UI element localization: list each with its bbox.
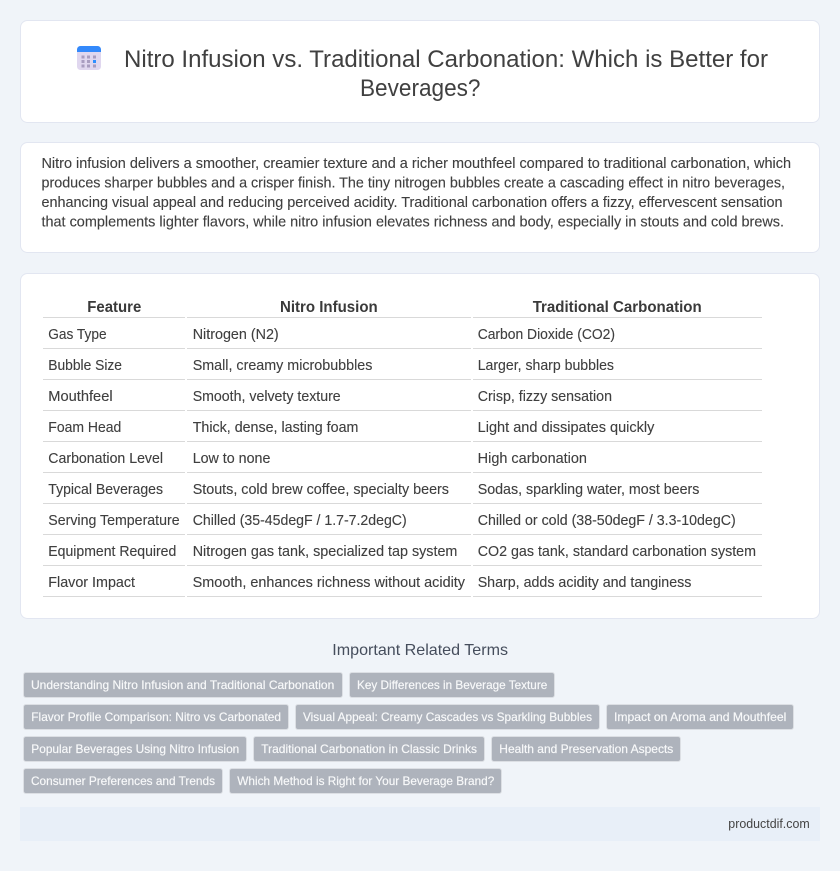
row: equipment required: CO2 gas tank, standard carbonation system [478,544,756,560]
tag: Traditional Carbonation in Classic Drinks [261,742,477,756]
row: bubble size [48,358,614,374]
tag: Understanding Nitro Infusion and Traditional Carbonation [31,678,334,692]
row: bubble size: Bubble Size [48,358,122,374]
footer bar [20,807,820,841]
panel: summary paragraph [20,142,820,252]
row: mouthfeel: Smooth, velvety texture [193,389,341,405]
row: typical beverages [48,482,699,498]
row: typical beverages: Sodas, sparkling water, most beers [478,482,699,498]
row: serving temperature: Chilled (35-45degF / 1.7-7.2degC) [193,513,407,529]
row: bubble size: Small, creamy microbubbles [193,358,372,374]
row: flavor impact: Sharp, adds acidity and tanginess [478,575,691,591]
heading: important related terms: Important Related Terms [332,642,508,659]
tag [350,672,554,698]
row: gas type: Nitrogen (N2) [193,327,279,343]
panel: comparison table [20,274,820,618]
text block: introduction: Nitro infusion delivers a smoother, creamier texture and a richer mouthfeel compared to traditional carbonation, which [42,156,791,172]
row: mouthfeel: Mouthfeel [48,389,113,405]
row: equipment required: Nitrogen gas tank, specialized tap system [193,544,457,560]
row: foam head: Thick, dense, lasting foam [193,420,358,436]
text block: introduction: that complements lighter flavors, while nitro infusion elevates richness and body, especially in stouts and cold brews. [42,214,784,230]
row: gas type: Carbon Dioxide (CO2) [478,327,615,343]
footer source text: productdif.com [728,817,810,831]
panel: title header [20,20,820,122]
row: carbonation level [48,451,587,467]
row: foam head: Foam Head [48,420,121,436]
table header row: Feature [87,299,141,316]
row: flavor impact: Flavor Impact [48,575,135,591]
tag [24,704,288,730]
title: Beverages? [360,75,480,102]
tag: Popular Beverages Using Nitro Infusion [31,742,239,756]
row: foam head [48,420,655,436]
tag: Which Method is Right for Your Beverage Brand? [237,774,495,788]
row: carbonation level: High carbonation [478,451,587,467]
row: serving temperature: Chilled or cold (38-50degF / 3.3-10degC) [478,513,736,529]
tag [24,736,246,762]
row: carbonation level: Low to none [193,451,270,467]
text block: introduction: enhancing visual appeal and reducing perceived acidity. Traditional carbonation offers a fizzy, effervescent sensation [42,195,782,211]
icon: calendar grid [77,46,101,70]
row: mouthfeel: Crisp, fizzy sensation [478,389,612,405]
row: equipment required: Equipment Required [48,544,176,560]
tag [254,736,484,762]
tag [296,704,600,730]
tag: Impact on Aroma and Mouthfeel [614,710,786,724]
row: equipment required [48,544,756,560]
row: mouthfeel [48,389,612,405]
row: gas type [48,327,615,343]
row: serving temperature [48,513,736,529]
row: bubble size: Larger, sharp bubbles [478,358,614,374]
tag [492,736,680,762]
table header row: Nitro Infusion [280,299,378,316]
title: Nitro Infusion vs. Traditional Carbonation: Which is Better for [124,46,768,73]
tag: Consumer Preferences and Trends [31,774,215,788]
text block: introduction [42,156,791,230]
tag [24,768,222,794]
tag: Flavor Profile Comparison: Nitro vs Carbonated [31,710,281,724]
table header row [87,299,702,316]
row: carbonation level: Carbonation Level [48,451,163,467]
title [124,46,768,102]
tag [24,672,342,698]
table header row: Traditional Carbonation [533,299,702,316]
row: flavor impact: Smooth, enhances richness without acidity [193,575,466,591]
tag: Visual Appeal: Creamy Cascades vs Sparkling Bubbles [303,710,592,724]
tag [606,704,794,730]
tag: Health and Preservation Aspects [499,742,673,756]
row: foam head: Light and dissipates quickly [478,420,655,436]
panel: related term tags [24,672,794,794]
row: typical beverages: Typical Beverages [48,482,163,498]
tag: Key Differences in Beverage Texture [357,678,548,692]
row: serving temperature: Serving Temperature [48,513,180,529]
text block: introduction: produces sharper bubbles and a crisper finish. The tiny nitrogen bubbles create a cascading effect in nitro beverages, [42,176,785,192]
tag [230,768,502,794]
row: gas type: Gas Type [48,327,107,343]
row: typical beverages: Stouts, cold brew coffee, specialty beers [193,482,449,498]
row: flavor impact [48,575,691,591]
